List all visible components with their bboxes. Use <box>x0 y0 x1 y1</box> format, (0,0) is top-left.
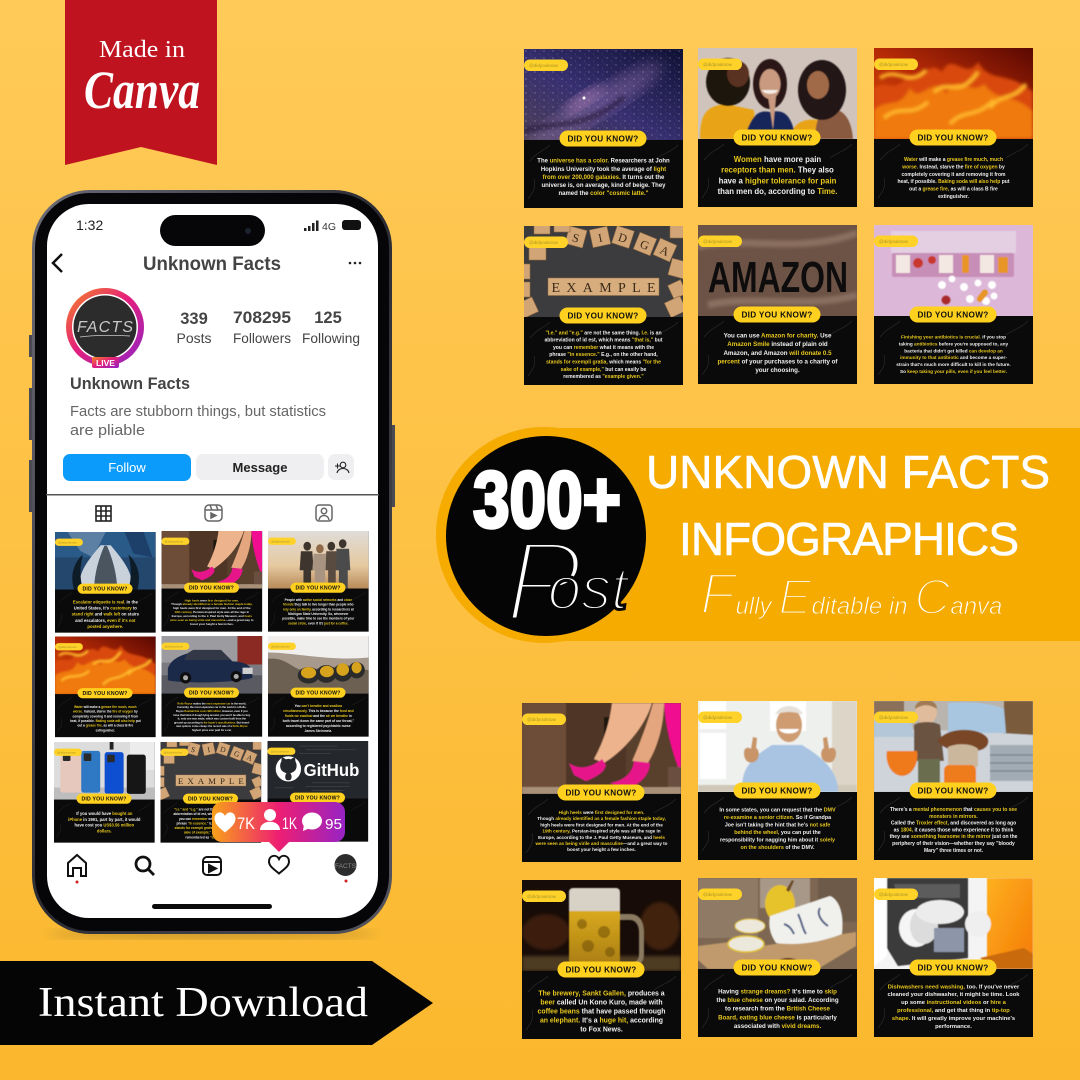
card: dmv: Joe isn't taking the hint that he's not safe <box>725 822 830 828</box>
profile name and bio <box>70 375 326 439</box>
profile name and bio: are pliable <box>70 423 145 439</box>
card: blue cheese: associated with vivid dreams. <box>734 1023 821 1030</box>
post: escalator <box>55 532 156 633</box>
follow and message buttons: Follow <box>108 460 146 475</box>
bottom navigation <box>68 854 357 909</box>
circle: 300+ post: P <box>505 518 582 646</box>
follow and message buttons <box>63 454 354 481</box>
card: blue cheese: Having strange dreams? It's time to skip <box>718 988 837 996</box>
profile stats: Posts <box>176 330 212 346</box>
profile tabs <box>46 494 379 521</box>
heading: infographics: INFOGRAPHICS <box>679 513 1019 565</box>
post: car <box>162 636 262 737</box>
circle: 300+ post <box>446 436 646 646</box>
card: blue cheese: the blue cheese on your salad. According <box>716 997 839 1004</box>
ribbon: made in canva: Canva <box>84 60 200 120</box>
notification badge: 1K <box>282 814 297 833</box>
phone post grid <box>54 531 369 843</box>
card: mirrors: periphery of their vision—whether they say "bloody <box>892 841 1015 847</box>
card: beer: to Fox News. <box>580 1026 623 1034</box>
icon: profile avatar: FACTS <box>335 863 357 870</box>
card: high heels <box>522 703 681 862</box>
notification badge <box>212 802 345 852</box>
post: friends <box>268 531 369 632</box>
card: blue cheese: Board, eating blue cheese is particularly <box>718 1014 837 1021</box>
card: amazon <box>698 225 857 384</box>
profile header <box>53 253 361 275</box>
status bar: 1:32 <box>76 217 103 233</box>
tagline: Fully Editable in Canva <box>700 562 1002 627</box>
avatar: LIVE <box>96 358 115 368</box>
status bar: 4G <box>322 221 336 233</box>
post: example <box>155 737 264 843</box>
card: dmv: responsibility for nagging him about it solely <box>720 837 835 843</box>
notification badge: 95 <box>325 816 342 833</box>
card: blue cheese: to research from the British Cheese <box>725 1006 831 1013</box>
avatar: FACTS <box>77 319 133 336</box>
ribbon: made in canva: Made in <box>99 37 185 63</box>
card: dishwasher: shape. It will greatly improve your machine's <box>892 1016 1015 1022</box>
profile header: Unknown Facts <box>143 253 281 275</box>
post: heels <box>162 531 262 632</box>
post: figs <box>268 636 369 737</box>
card: dmv <box>698 701 857 860</box>
avatar <box>66 288 144 368</box>
card: dmv: In some states, you can request that the DMV <box>719 807 836 813</box>
profile stats <box>176 308 360 346</box>
title band <box>436 427 1080 646</box>
profile name and bio: Facts are stubborn things, but statistics <box>70 404 326 420</box>
circle: 300+ post: 300+ <box>473 455 621 544</box>
icon: search <box>136 857 154 875</box>
profile stats: 339 <box>180 310 208 328</box>
post: iphones <box>54 742 155 843</box>
icon: profile avatar <box>334 854 357 876</box>
card: example <box>515 218 688 385</box>
icon: reels <box>203 857 221 875</box>
profile stats: Following <box>302 330 360 346</box>
ribbon: made in canva <box>65 0 217 165</box>
icon: heart <box>269 856 289 874</box>
card: mirrors: they see something fearsome in the mirror just on the <box>890 834 1018 840</box>
profile name and bio: Unknown Facts <box>70 375 190 393</box>
card: women <box>698 48 857 207</box>
card: mirrors: Mary" three times or not. <box>924 848 984 854</box>
card: mirrors: Called the Troxler effect, and discovered as long ago <box>891 821 1016 827</box>
card: blue cheese <box>698 878 857 1037</box>
card: beer: beer called Un Kono Kuro, made with <box>540 1000 663 1006</box>
follow and message buttons: Message <box>233 460 287 475</box>
post: fire <box>55 636 156 737</box>
profile stats: Followers <box>233 330 291 346</box>
card: fire <box>874 48 1033 207</box>
profile stats: 708295 <box>233 308 291 327</box>
card: dishwasher: performance. <box>935 1024 972 1030</box>
card: dishwasher: up some instructional videos or hire a <box>901 1000 1007 1006</box>
heading: unknown facts: UNKNOWN FACTS <box>646 446 1050 498</box>
phone mockup <box>29 190 395 939</box>
card: antibiotics <box>874 225 1033 384</box>
card: dishwasher <box>874 878 1033 1037</box>
instant download banner <box>0 961 433 1045</box>
home indicator <box>152 904 272 909</box>
post: github <box>268 741 368 842</box>
icon: home <box>68 855 86 876</box>
status bar <box>76 215 361 246</box>
card: universe <box>519 49 683 208</box>
card: mirrors: There's a mental phenomenon that causes you to see <box>890 807 1017 813</box>
instant download banner: Instant Download <box>38 980 368 1026</box>
card: beer: an elephant. It's a huge hit, according <box>540 1018 663 1024</box>
card: dmv: behind the wheel, you can put the <box>734 830 821 836</box>
notification badge: 7K <box>237 814 256 833</box>
card: dishwasher: professional, and get that thing in tip-top <box>897 1008 1010 1014</box>
profile stats: 125 <box>314 309 342 327</box>
card: dishwasher: Dishwashers need washing, too. If you've never <box>888 984 1020 990</box>
card: mirrors: as 1804, it causes those who experience it to think <box>894 827 1014 833</box>
card: mirrors: monsters in mirrors. <box>929 814 978 820</box>
card: beer: The brewery, Sankt Gallen, produces a <box>538 990 665 998</box>
card: dishwasher: cleaned your dishwasher, it might be time. Look <box>887 992 1020 998</box>
card: mirrors <box>874 700 1033 860</box>
circle: 300+ post: ost <box>548 555 630 622</box>
card: beer: coffee beans that have passed through <box>538 1008 665 1016</box>
card: beer <box>522 880 681 1039</box>
card: dmv: re-examine a senior citizen. So if Grandpa <box>724 815 832 821</box>
card: dmv: on the shoulders of the DMV. <box>740 845 815 851</box>
activity dots <box>76 880 348 884</box>
phone body <box>29 190 395 934</box>
